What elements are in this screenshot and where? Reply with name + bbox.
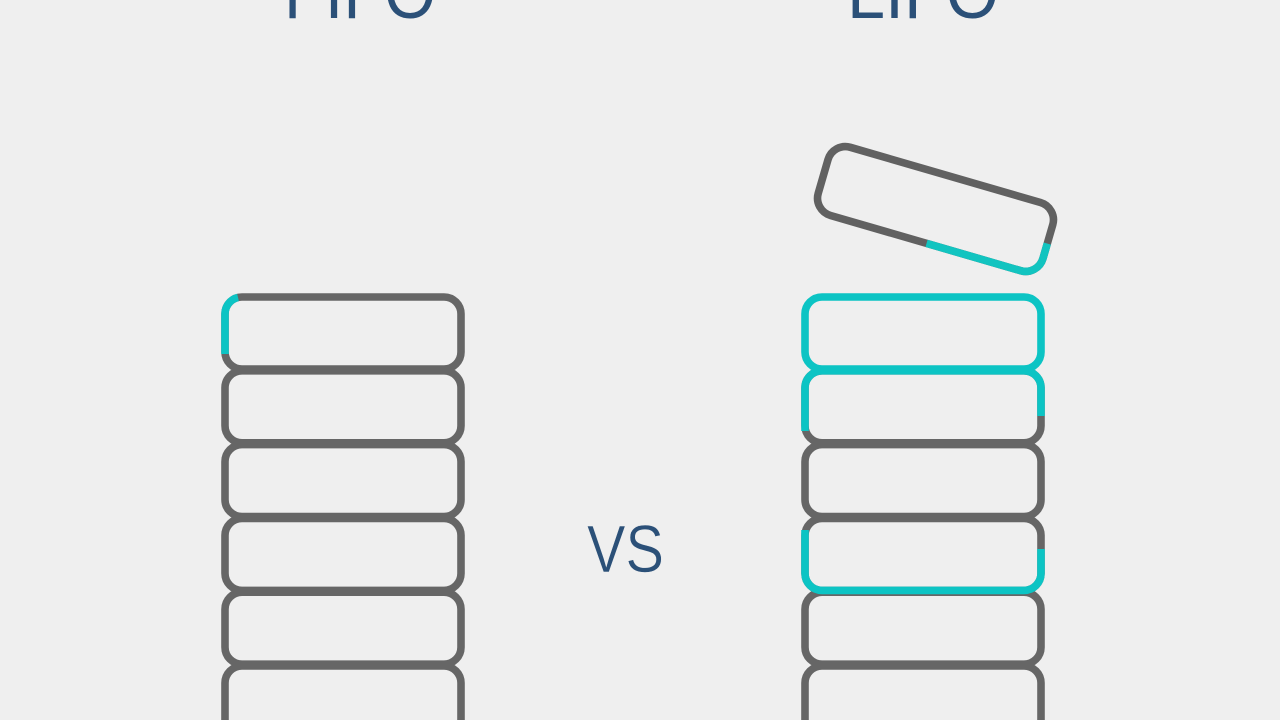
LIFO block 2 — [805, 371, 1041, 443]
FIFO block 5 — [225, 592, 461, 664]
label: VS: VS — [587, 512, 664, 587]
LIFO block 6 — [805, 666, 1041, 720]
FIFO block 3 — [225, 445, 461, 517]
FIFO block 4 — [225, 518, 461, 590]
FIFO block 2 — [225, 371, 461, 443]
LIFO block 4 — [805, 518, 1041, 590]
LIFO tilted block — [813, 142, 1058, 276]
LIFO block 5 — [805, 592, 1041, 664]
LIFO stack — [805, 297, 1041, 720]
LIFO block 3 — [805, 445, 1041, 517]
FIFO block 6 — [225, 666, 461, 720]
LIFO block 1 — [805, 297, 1041, 369]
FIFO block 1 teal segment — [225, 297, 238, 354]
tilted block teal segment — [927, 211, 1047, 276]
FIFO block 1 — [225, 297, 461, 369]
FIFO stack — [225, 297, 461, 720]
